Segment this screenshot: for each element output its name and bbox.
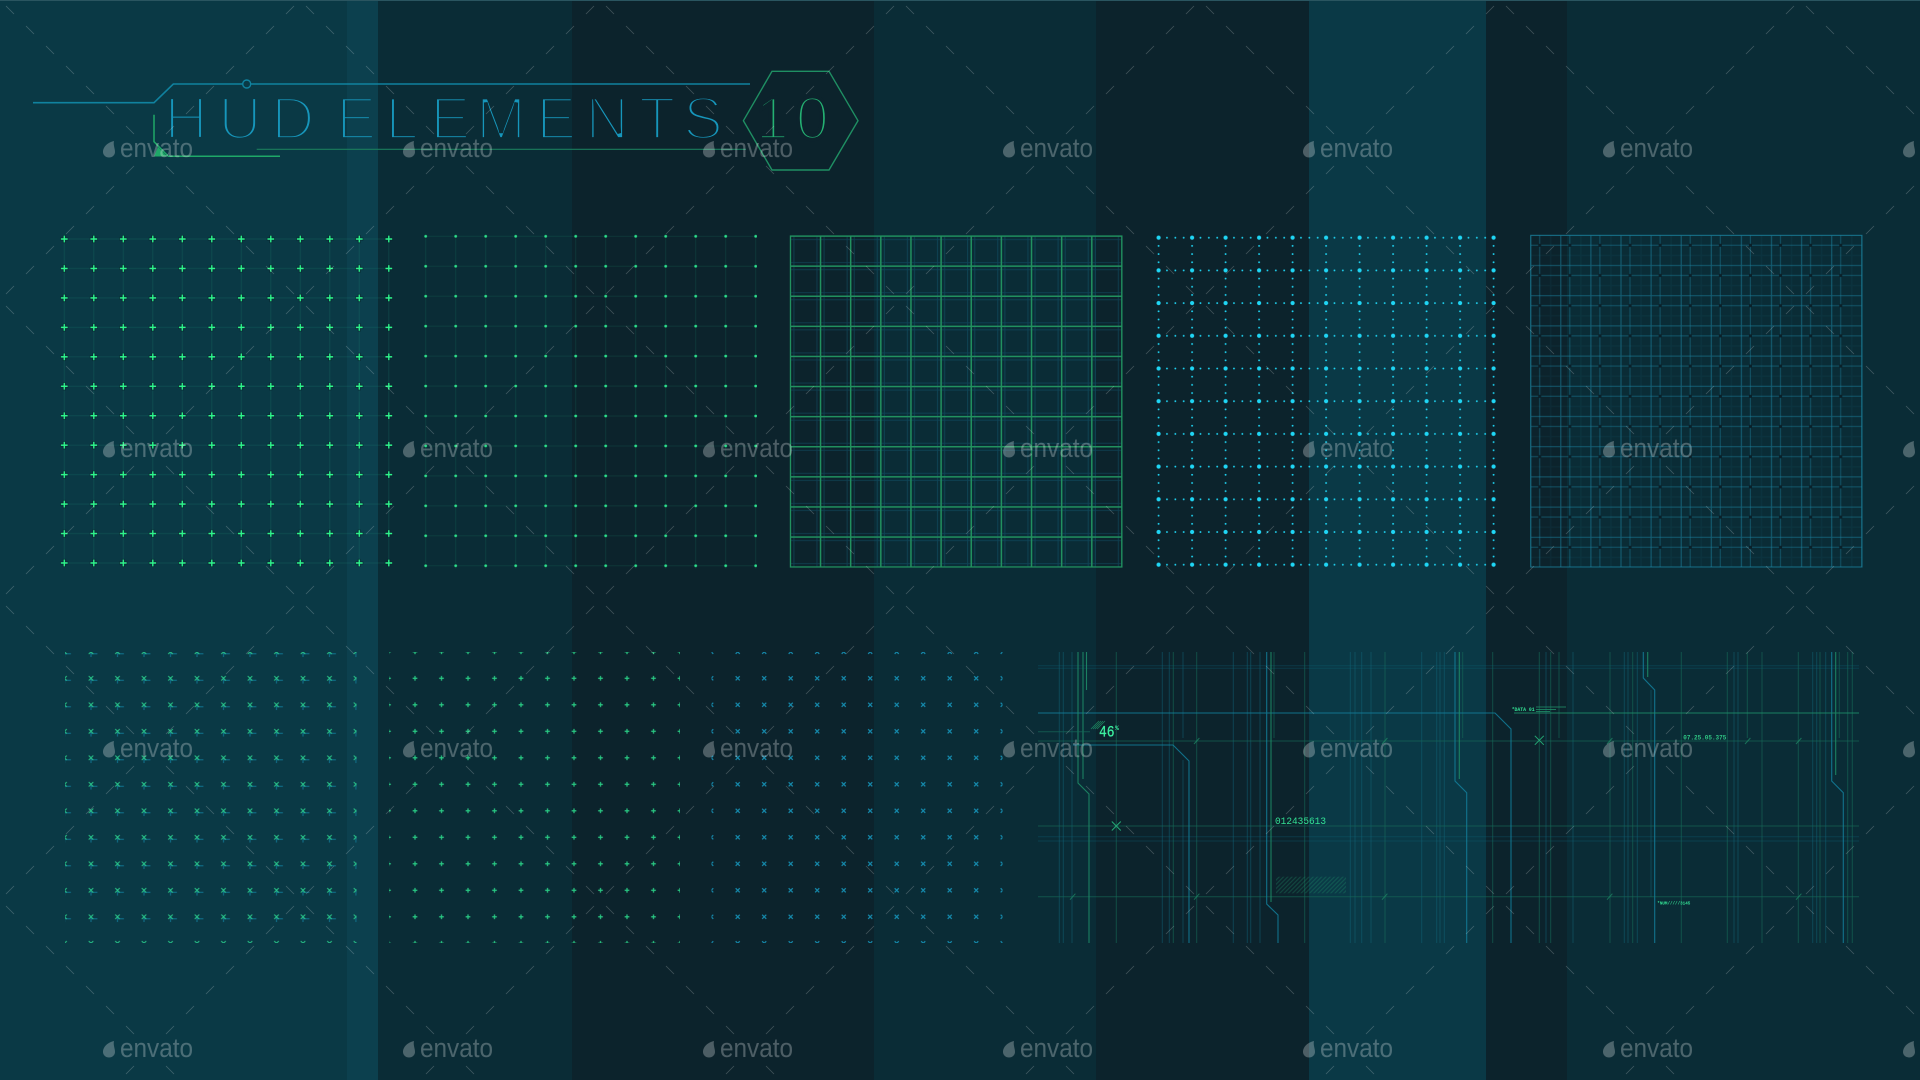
envato watermarks: envato <box>420 133 493 163</box>
faint blue verticals <box>1059 652 1826 943</box>
readout: data 01: *DATA 01 <box>1512 707 1535 713</box>
title node circle <box>243 80 251 88</box>
grid 8: blue cross markers <box>712 652 1002 943</box>
envato watermarks: envato <box>1320 1033 1393 1063</box>
envato watermarks: envato <box>1020 433 1093 463</box>
envato watermarks: envato <box>120 1033 193 1063</box>
envato watermarks: envato <box>420 733 493 763</box>
grid 6: green cross with blue plus markers <box>65 652 356 943</box>
faint blue horizontals <box>1038 666 1859 841</box>
grid 7: green small plus markers <box>389 652 680 943</box>
envato watermarks: envato <box>1620 433 1693 463</box>
green traces <box>1078 652 1859 943</box>
title lockup <box>33 71 858 170</box>
grid 5: blue double-line grid <box>1531 235 1862 567</box>
envato watermarks: envato <box>420 433 493 463</box>
panel: circuit lines with data readouts <box>1038 652 1859 943</box>
readout: 46%: % <box>1115 725 1119 732</box>
title word: HUD: HUD <box>164 85 315 152</box>
envato watermarks: envato <box>1620 1033 1693 1063</box>
envato watermarks: envato <box>720 433 793 463</box>
hatched block <box>1276 877 1346 893</box>
envato watermarks: envato <box>1020 133 1093 163</box>
title underline <box>257 148 746 150</box>
title circuit line: blue <box>33 84 750 103</box>
title circuit line: green <box>154 115 280 156</box>
faint green verticals <box>1116 652 1852 943</box>
faint horizontals <box>1038 741 1859 897</box>
envato watermarks: envato <box>1320 133 1393 163</box>
envato watermarks: envato <box>1320 433 1393 463</box>
badge number: 10 <box>756 85 829 152</box>
envato watermarks: envato <box>120 733 193 763</box>
readout: number string: 012435613 <box>1275 817 1326 828</box>
readout: num string: *NUM/////3145 <box>1657 901 1691 906</box>
envato watermarks: envato <box>720 733 793 763</box>
grid 4: cyan dotted grid <box>1155 234 1498 568</box>
title word: ELEMENTS: ELEMENTS <box>336 85 723 152</box>
hexagon badge <box>743 71 858 170</box>
envato watermarks: envato <box>120 433 193 463</box>
small slash marks <box>1070 738 1801 900</box>
envato watermarks: envato <box>1320 733 1393 763</box>
grid 1: green plus markers <box>60 235 393 567</box>
envato watermarks: envato <box>720 1033 793 1063</box>
envato watermarks: envato <box>120 133 193 163</box>
envato watermarks: envato <box>1620 133 1693 163</box>
envato watermarks: envato <box>1020 1033 1093 1063</box>
readout: 46%: 46 <box>1099 724 1114 742</box>
grid 2: green dots <box>424 234 757 568</box>
readout: data 01 <box>1512 707 1566 713</box>
envato watermarks: envato <box>720 133 793 163</box>
title corner triangle <box>154 147 167 156</box>
envato watermarks: envato <box>420 1033 493 1063</box>
blue traces <box>1038 652 1843 943</box>
marker crosses <box>1112 736 1544 830</box>
grid 3: green square grid <box>790 236 1122 567</box>
readout: timecode: 07.25.05.375 <box>1683 734 1727 741</box>
readout: 46% <box>1038 721 1119 742</box>
envato watermarks: envato <box>1620 733 1693 763</box>
envato watermarks: envato <box>1020 733 1093 763</box>
